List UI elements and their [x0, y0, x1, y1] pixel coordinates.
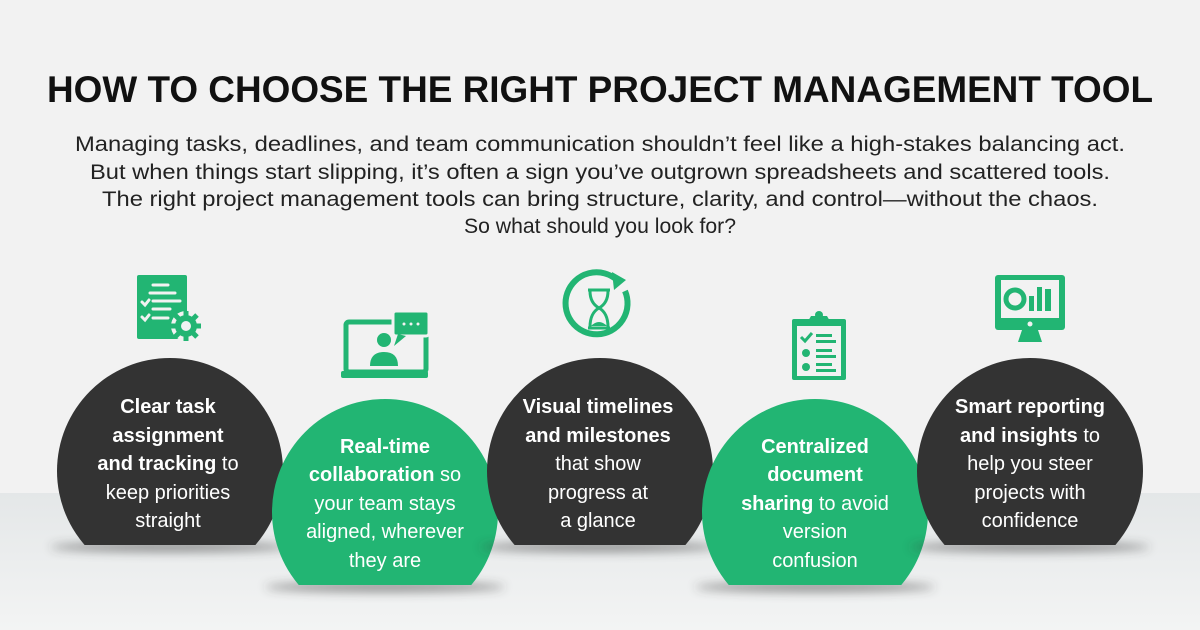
- panel: reporting: Smart reporting: [955, 396, 1105, 418]
- panel: reporting: projects with: [974, 482, 1086, 504]
- panel: document sharing: version: [783, 521, 847, 543]
- panel: task assignment: straight: [135, 510, 201, 532]
- panel: document sharing: sharing to avoid: [741, 493, 889, 515]
- icon: clock with hourglass: [566, 272, 628, 334]
- intro text: But when things start slipping, it’s often a sign you’ve outgrown spreadsheets and scattered tools.: [90, 161, 1110, 184]
- panel: task assignment: and tracking to: [97, 453, 239, 475]
- panel: timelines: that show: [555, 453, 641, 475]
- intro text: The right project management tools can bring structure, clarity, and control—without the chaos.: [102, 188, 1098, 211]
- panel: reporting: and insights to: [960, 425, 1100, 447]
- panel: collaboration: Real-time: [340, 436, 430, 458]
- panel: task assignment: keep priorities: [106, 482, 230, 504]
- panel: timelines: progress at: [548, 482, 648, 504]
- intro text: Managing tasks, deadlines, and team communication shouldn’t feel like a high-stakes balancing act.: [75, 133, 1125, 156]
- panel: document sharing: document: [767, 464, 863, 486]
- icon: clipboard checklist: [792, 311, 846, 380]
- panel: collaboration: aligned, wherever: [306, 521, 464, 543]
- panel: timelines: a glance: [560, 510, 636, 532]
- panel: timelines: [482, 358, 713, 558]
- title: HOW TO CHOOSE THE RIGHT PROJECT MANAGEMENT TOOL: [47, 69, 1153, 110]
- panel: task assignment: [50, 358, 283, 558]
- panel: collaboration: [265, 399, 505, 598]
- panel: reporting: help you steer: [967, 453, 1093, 475]
- panel: document sharing: confusion: [772, 550, 858, 572]
- panel: collaboration: collaboration so: [309, 464, 461, 486]
- panel: timelines: and milestones: [525, 425, 671, 447]
- panel: task assignment: assignment: [112, 425, 224, 447]
- intro text: [75, 133, 1125, 238]
- panel: reporting: confidence: [982, 510, 1078, 532]
- icon: laptop video chat: [341, 311, 429, 378]
- panel: collaboration: your team stays: [314, 493, 456, 515]
- panel: timelines: Visual timelines: [523, 396, 673, 418]
- icon: monitor with charts: [995, 275, 1065, 342]
- intro text: So what should you look for?: [464, 215, 736, 238]
- panel: document sharing: Centralized: [761, 436, 869, 458]
- icon: document with gear: [137, 275, 201, 341]
- panel: document sharing: [695, 399, 935, 598]
- panel: collaboration: they are: [349, 550, 421, 572]
- panel: reporting: [912, 358, 1150, 558]
- panel: task assignment: Clear task: [120, 396, 217, 418]
